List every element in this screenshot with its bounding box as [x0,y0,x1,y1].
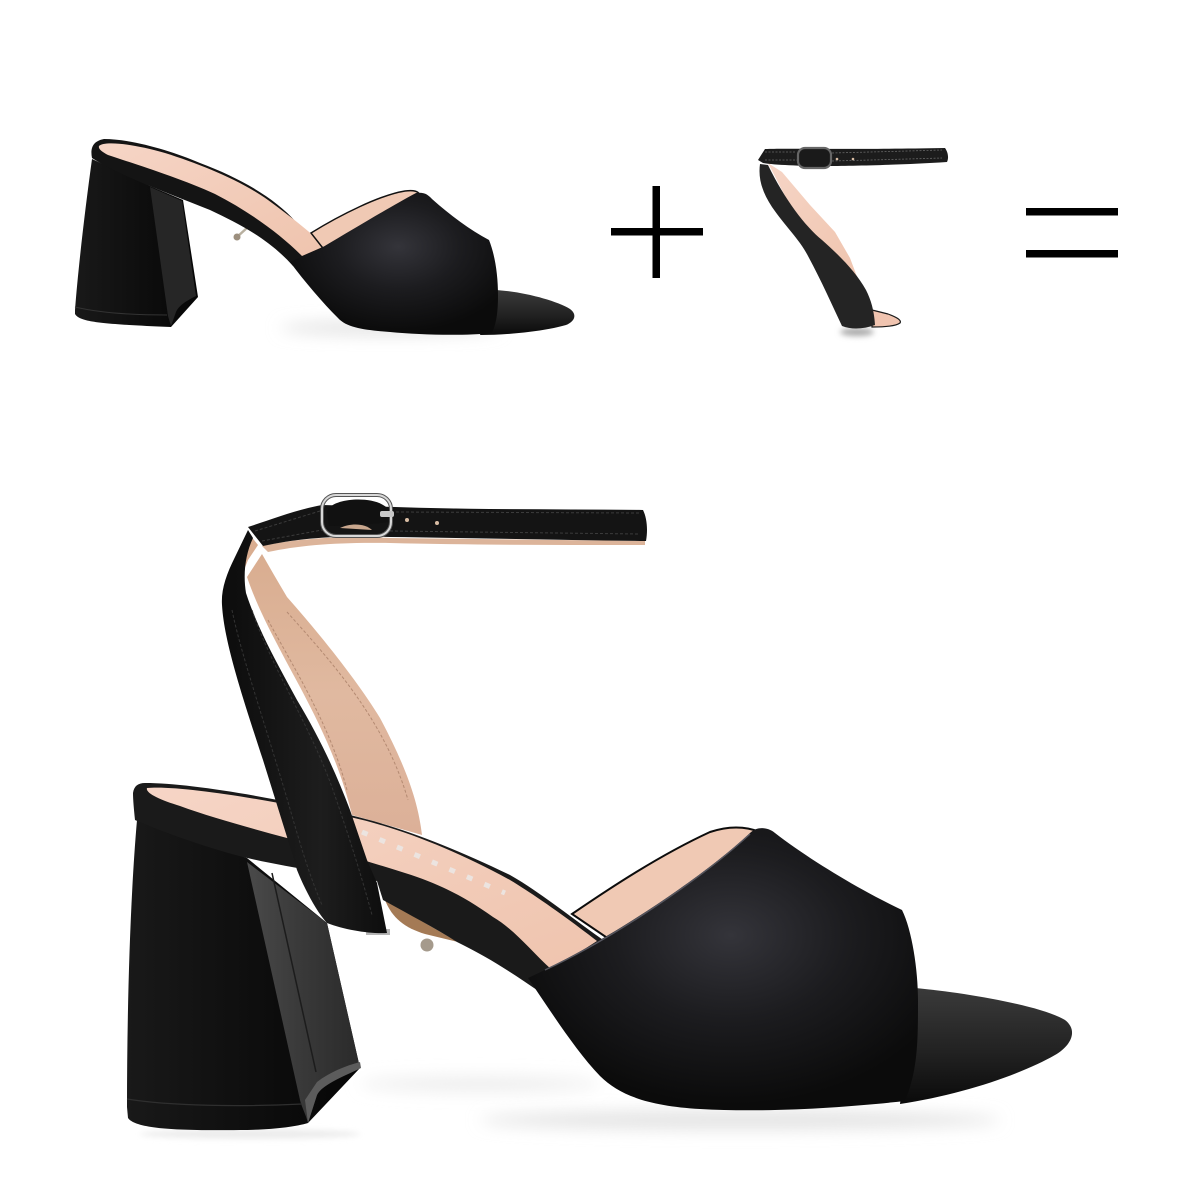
mule vamp [290,193,498,335]
ground shadow [140,1077,1000,1139]
heel top piece [305,1062,361,1123]
diagonal black strap [222,530,387,933]
strap shadow [840,328,874,336]
footbed edge [133,783,615,992]
strap pink lining [768,163,859,282]
back strap stitching [268,612,408,800]
mule metal pin [234,227,248,240]
strap holes [405,518,439,525]
strap stitching [232,610,372,915]
vamp top edge highlight [545,834,750,970]
mule shoe [75,139,574,335]
metal fitting [366,900,458,952]
insole logo marks [362,832,505,893]
ankle strap stitching [255,511,640,541]
back pink strap [247,554,422,835]
heel block [127,820,361,1130]
ankle strap lining [262,537,645,552]
mule heel block [75,159,198,327]
heel base line [127,1099,302,1106]
strap sole tab [872,310,900,327]
footbed pink insole [147,788,597,970]
equals sign [1026,208,1118,258]
mule toe bed [480,290,574,335]
front inner lining [572,828,760,950]
ankle strap [248,505,647,546]
strap lining corner [244,535,258,570]
strap black band [760,164,875,329]
small buckle [798,148,831,168]
mule shadow [280,322,500,334]
heel inner face [247,862,360,1123]
belt stitching [765,150,942,161]
toe bed [900,988,1072,1104]
ankle belt [758,148,948,166]
buckle [322,495,394,536]
mule footbed [91,139,326,266]
heel face seam [272,873,316,1072]
belt holes [836,158,854,160]
ankle strap piece [758,148,948,336]
mule inner lining [311,191,420,255]
plus sign [611,186,703,278]
assembled sandal [127,495,1072,1139]
vamp [528,828,918,1110]
